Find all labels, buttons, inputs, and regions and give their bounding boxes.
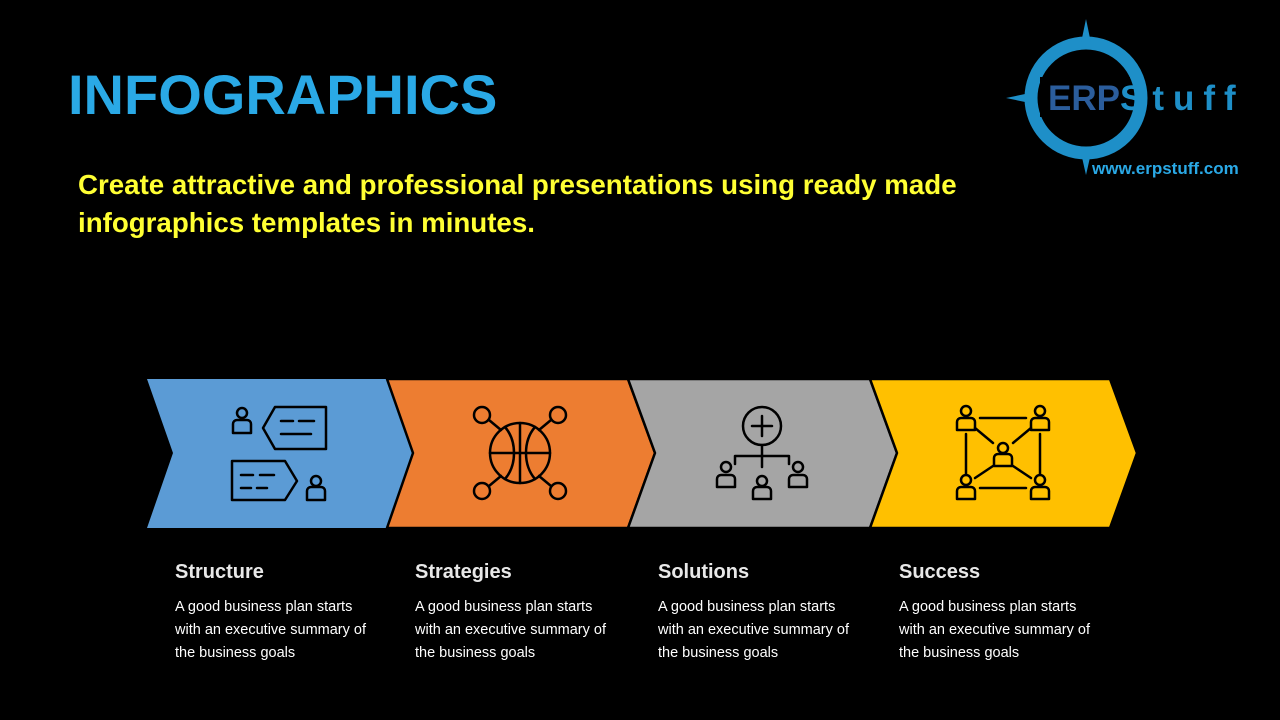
text: solutions: A good business plan starts with an executive summary of the business goals — [658, 599, 849, 661]
chevron: success — [870, 379, 1137, 528]
chevron: structure — [147, 379, 413, 528]
title: INFOGRAPHICS — [68, 63, 497, 126]
logo: Stuff — [1120, 79, 1245, 118]
chevron: strategies — [387, 379, 655, 528]
text: success: A good business plan starts with an executive summary of the business goals — [899, 599, 1090, 661]
icon: network — [957, 406, 1049, 499]
icon: team ball — [474, 407, 566, 499]
text: strategies: A good business plan starts with an executive summary of the business goals — [415, 599, 606, 661]
subtitle: Create attractive and professional presentations using ready made infographics templates in minutes. — [78, 169, 957, 238]
text: structure — [175, 561, 366, 661]
text: structure: Structure — [175, 561, 264, 583]
icon: hierarchy — [717, 407, 807, 499]
text: success: Success — [899, 561, 980, 583]
chevron process band — [147, 379, 1136, 528]
text: structure: A good business plan starts with an executive summary of the business goals — [175, 599, 366, 661]
text: strategies: Strategies — [415, 561, 512, 583]
text: solutions: Solutions — [658, 561, 749, 583]
logo: www.erpstuff.com — [1091, 159, 1239, 178]
logo: ERP — [1048, 79, 1120, 118]
text: strategies — [415, 561, 606, 661]
logo — [1006, 19, 1245, 178]
icon: conversation — [232, 407, 326, 500]
text: success — [899, 561, 1090, 661]
text: solutions — [658, 561, 850, 661]
chevron: solutions — [628, 379, 897, 528]
